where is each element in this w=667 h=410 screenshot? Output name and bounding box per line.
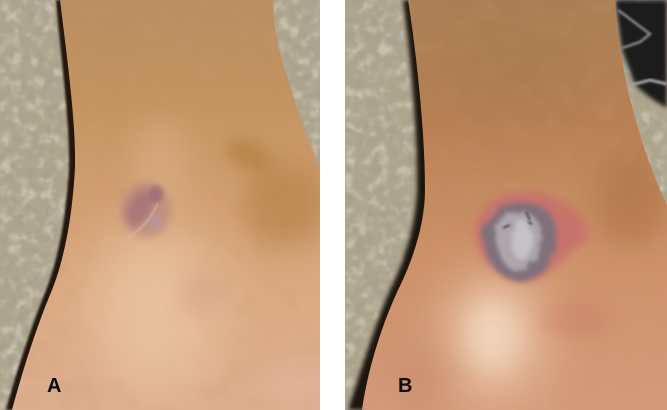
leg and foot: [0, 0, 340, 410]
leg shadow edge: [348, 0, 432, 410]
photo B: larger lesion on ankle: [345, 0, 667, 410]
label B: B: [398, 375, 412, 397]
background: carpet texture: [0, 0, 320, 410]
lesion B: [475, 192, 588, 282]
background: carpet texture: [345, 0, 667, 410]
dark patterned object: [615, 0, 667, 108]
lesion A: [121, 182, 171, 238]
leg shadow edge: [6, 0, 79, 410]
leg and foot: [345, 0, 667, 410]
photo A: smaller lesion on ankle: [0, 0, 340, 410]
label A: A: [47, 375, 61, 397]
